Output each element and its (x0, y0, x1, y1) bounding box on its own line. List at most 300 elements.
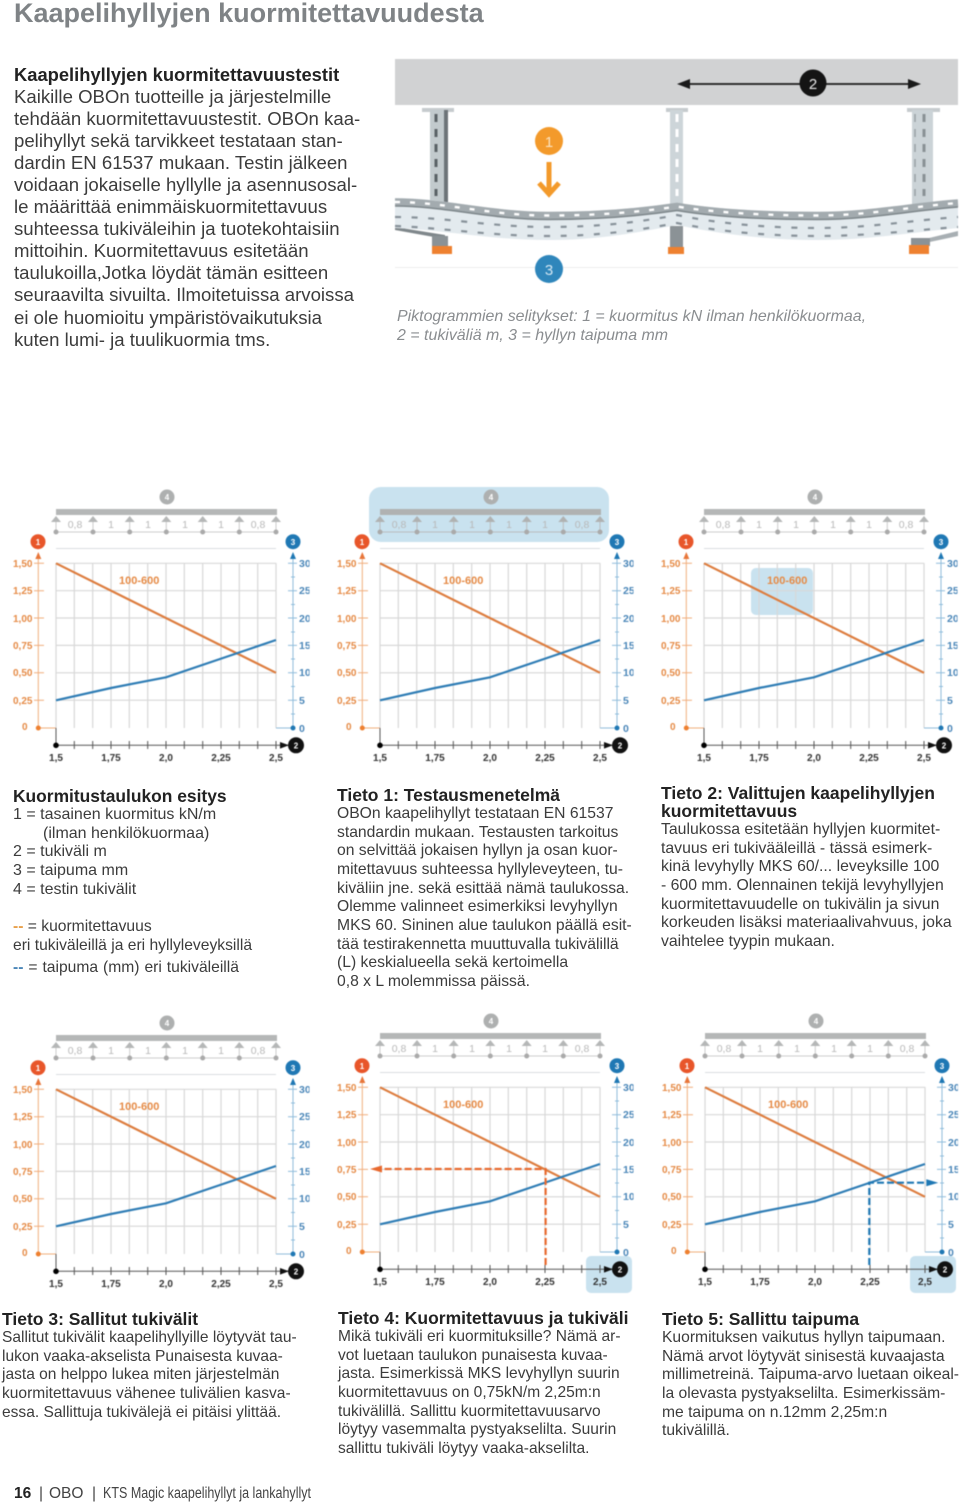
text block: fact 4: sallittu tukiväli löytyy vaaka-akselilta. (338, 1440, 589, 1457)
text block: fact 5 (662, 1309, 959, 1439)
right axis: 5 (947, 695, 953, 707)
test spans (51, 490, 281, 548)
test spans: 0,8 (392, 1043, 406, 1055)
left axis: 0,50 (13, 668, 33, 679)
test spans: 1 (432, 1043, 438, 1055)
x axis: 2,25 (535, 753, 555, 764)
left axis: 1,00 (13, 614, 33, 625)
text block: fact 3: Tieto 3: Sallitut tukivälit (2, 1309, 198, 1329)
left axis: 1,50 (662, 1083, 682, 1094)
test spans: 1 (756, 519, 762, 531)
grid (56, 1089, 276, 1254)
highlight: max span (586, 1256, 632, 1293)
grid (380, 563, 600, 728)
chart 6 (662, 1013, 960, 1294)
deflection line (380, 640, 600, 700)
text block: fact 2: - 600 mm. Olennainen tekijä levyhyllyjen (661, 877, 944, 894)
left axis: 1,25 (662, 1110, 682, 1121)
text block: fact 1: standardin mukaan. Testausten tarkoitus (337, 824, 618, 841)
right axis: 10 (947, 667, 959, 679)
test spans (375, 1014, 605, 1072)
text block: chart explanation: 2 = tukiväli m (13, 843, 107, 860)
text block: fact 4: vot luetaan taulukon punaisesta kuvaa- (338, 1347, 608, 1364)
left axis: 0,75 (13, 1167, 33, 1178)
x axis: 2,25 (859, 753, 879, 764)
text block: fact 3: essa. Sallittuja tukivälejä ei pitäisi ylittää. (2, 1404, 281, 1421)
right axis: 3 (291, 1064, 296, 1073)
left axis: 1 (360, 538, 365, 547)
right axis: 25 (299, 1111, 311, 1123)
right axis: 15 (623, 640, 635, 652)
right axis: 10 (623, 667, 635, 679)
text block: fact 1: MKS 60. Sininen alue taulukon päällä esit- (337, 917, 632, 934)
grid (380, 1087, 600, 1252)
left axis: 0,25 (662, 1220, 682, 1231)
ceiling band (395, 59, 958, 105)
test spans: 4 (489, 493, 494, 502)
footer brand: | (39, 1485, 43, 1502)
right axis: 30 (948, 1082, 960, 1094)
left axis: 0,25 (13, 1222, 33, 1233)
text block: load tests: tehdään kuormitettavuustestit. OBOn kaa- (14, 108, 360, 129)
right axis (924, 534, 960, 735)
test spans: 1 (182, 1045, 188, 1057)
right axis: 25 (948, 1109, 960, 1121)
load line (380, 563, 600, 673)
test spans: 1 (867, 1043, 873, 1055)
text block: fact 3: jasta on helppo lukea miten järjestelmän (2, 1366, 279, 1383)
right axis: 0 (623, 1247, 629, 1259)
left axis: 0,75 (337, 641, 357, 652)
cable tray (395, 198, 958, 240)
right axis: 15 (948, 1164, 960, 1176)
x axis: 2 (618, 1266, 623, 1274)
right axis: 25 (947, 585, 959, 597)
test spans: 0,8 (716, 519, 730, 531)
text block: chart explanation: (ilman henkilökuormaa) (43, 825, 209, 842)
orange feet (432, 245, 929, 254)
load line: 100-600 (443, 575, 483, 587)
text block: load tests (14, 64, 360, 350)
test spans: 4 (165, 1019, 170, 1028)
deflection line (704, 640, 924, 700)
text block: fact 4: kuormitettavuus on 0,75kN/m 2,25m:n (338, 1384, 601, 1401)
left axis: 0 (346, 1246, 352, 1257)
left axis: 0,25 (337, 696, 357, 707)
left axis: 1,50 (337, 559, 357, 570)
illustration: cable tray under load (394, 58, 959, 284)
badge 1: 1 (545, 134, 553, 151)
right axis: 0 (299, 1249, 305, 1261)
right axis: 0 (299, 723, 305, 735)
test spans: 1 (793, 519, 799, 531)
text block: fact 4 (338, 1308, 628, 1457)
load line: 100-600 (119, 575, 159, 587)
text block: chart explanation: Kuormitustaulukon esitys (13, 786, 227, 806)
text block: fact 4: jasta. Esimerkissä MKS levyhyllyn suurin (338, 1365, 620, 1382)
badge 2: 2 (809, 76, 817, 93)
x axis: 2,25 (211, 1279, 231, 1290)
right axis: 0 (947, 723, 953, 735)
load line: 100-600 (767, 575, 807, 587)
x axis: 1,75 (425, 1277, 445, 1288)
right axis: 10 (948, 1191, 960, 1203)
text block: load tests: Kaikille OBOn tuotteille ja järjestelmille (14, 86, 331, 107)
left axis: 1,00 (337, 1138, 357, 1149)
load line: 100-600 (768, 1099, 808, 1111)
right axis: 5 (299, 1221, 305, 1233)
x axis: 2 (294, 1268, 299, 1276)
test spans: 4 (814, 1017, 819, 1026)
text block: fact 2: vaihtelee tyypin mukaan. (661, 933, 835, 950)
page number: 16 (14, 1485, 32, 1502)
legend (13, 918, 252, 976)
right axis: 3 (615, 538, 620, 547)
test spans: 1 (542, 1043, 548, 1055)
load line (705, 1087, 925, 1197)
x axis: 1,5 (49, 753, 63, 764)
x axis: 1,75 (749, 753, 769, 764)
right axis (276, 1060, 320, 1261)
right axis: 20 (948, 1137, 960, 1149)
left axis: 0,50 (661, 668, 681, 679)
text block: fact 1 (337, 785, 632, 990)
test spans: 1 (506, 519, 512, 531)
right axis: 25 (299, 585, 311, 597)
text block: load tests: le määrittää enimmäiskuormitettavuus (14, 196, 327, 217)
x axis (373, 1252, 628, 1288)
test spans: 1 (145, 1045, 151, 1057)
test spans (375, 490, 605, 548)
test spans: 1 (794, 1043, 800, 1055)
legend: -- = taipuma (mm) eri tukiväleillä (13, 959, 239, 976)
text block: load tests: kuten lumi- ja tuulikuormia tms. (14, 329, 270, 350)
right axis: 0 (623, 723, 629, 735)
text block: fact 2: korkeuden lisäksi materiaalivahvuus, joka (661, 914, 952, 931)
right axis: 3 (615, 1062, 620, 1071)
load line (56, 1089, 276, 1199)
test spans: 0,8 (899, 519, 913, 531)
left axis: 0,50 (337, 1192, 357, 1203)
right axis: 0 (948, 1247, 954, 1259)
x axis: 2,0 (483, 753, 497, 764)
footer brand: | (92, 1485, 96, 1502)
left axis: 1,50 (661, 559, 681, 570)
test spans: 0,8 (68, 1045, 82, 1057)
left axis: 0,75 (662, 1165, 682, 1176)
text block: fact 1: on selvittää jokaisen hyllyn ja osan kuor- (337, 842, 618, 859)
x axis: 2,5 (269, 1279, 283, 1290)
left axis: 1,50 (337, 1083, 357, 1094)
right axis: 15 (299, 1166, 311, 1178)
deflection line (56, 640, 276, 700)
text block: fact 4: tukivälillä. Sallittu kuormitettavuusarvo (338, 1403, 601, 1420)
right axis (600, 1058, 644, 1259)
right axis: 20 (299, 1139, 311, 1151)
text block: fact 5: Kuormituksen vaikutus hyllyn taipumaan. (662, 1329, 945, 1346)
x axis: 1,5 (697, 753, 711, 764)
left axis: 0,50 (337, 668, 357, 679)
x axis: 2,5 (918, 1277, 932, 1288)
text block: load tests: taulukoilla,Jotka löydät tämän esitteen (14, 262, 328, 283)
text block: chart explanation: 3 = taipuma mm (13, 862, 128, 879)
text block: fact 5: millimetreinä. Taipuma-arvo luetaan oikeal- (662, 1366, 959, 1383)
x axis: 2,0 (159, 1279, 173, 1290)
text block: fact 1: Tieto 1: Testausmenetelmä (337, 785, 560, 805)
right axis: 25 (623, 585, 635, 597)
load line (380, 1087, 600, 1197)
x axis (698, 1252, 953, 1288)
test spans: 1 (182, 519, 188, 531)
text block: fact 1: kiväliin jne. sekä esittää nämä taulukossa. (337, 880, 629, 897)
x axis: 2 (618, 742, 623, 750)
right axis: 20 (947, 613, 959, 625)
load line (56, 563, 276, 673)
x axis: 1,5 (698, 1277, 712, 1288)
text block: fact 2: kinä levyhylly MKS 60/... leveyksille 100 (661, 858, 939, 875)
x axis: 2 (942, 742, 947, 750)
text block: chart explanation (13, 786, 227, 898)
test spans: 1 (506, 1043, 512, 1055)
right axis: 10 (623, 1191, 635, 1203)
load line: 100-600 (119, 1101, 159, 1113)
left axis: 0,25 (13, 696, 33, 707)
left axis: 0,75 (13, 641, 33, 652)
text block: fact 3 (2, 1309, 297, 1421)
x axis: 2,0 (159, 753, 173, 764)
deflection line (380, 1164, 600, 1224)
text block: load tests: mittoihin. Kuormitettavuus esitetään (14, 240, 309, 261)
right axis: 30 (299, 558, 311, 570)
text block: chart explanation: 4 = testin tukivälit (13, 881, 136, 898)
test spans: 1 (108, 519, 114, 531)
test spans: 1 (866, 519, 872, 531)
right axis: 10 (299, 1193, 311, 1205)
arrow: load (539, 162, 559, 194)
right axis: 20 (623, 613, 635, 625)
text block: fact 5: la olevasta pystyakselilta. Esimerkissäm- (662, 1385, 945, 1402)
x axis (373, 728, 628, 764)
test spans: 0,8 (251, 519, 265, 531)
right axis: 3 (940, 1062, 945, 1071)
left axis (661, 534, 704, 733)
test spans (700, 1014, 930, 1072)
test spans: 1 (757, 1043, 763, 1055)
left axis: 0,25 (337, 1220, 357, 1231)
left axis: 0 (671, 1246, 677, 1257)
left axis: 0 (22, 722, 28, 733)
right axis: 15 (299, 640, 311, 652)
left axis: 0,50 (13, 1194, 33, 1205)
arrow: span (677, 79, 921, 89)
x axis: 1,5 (49, 1279, 63, 1290)
badge 1 (535, 127, 563, 155)
left axis: 0,75 (337, 1165, 357, 1176)
test spans (51, 1016, 281, 1074)
left axis: 1,00 (661, 614, 681, 625)
test spans (699, 490, 929, 548)
highlight: width label (751, 568, 813, 615)
test spans: 0,8 (717, 1043, 731, 1055)
chart 3 (660, 489, 959, 764)
text block: fact 2: Taulukossa esitetään hyllyjen kuormitet- (661, 821, 940, 838)
text block: load tests: voidaan jokaiselle hyllylle ja asennusosal- (14, 174, 357, 195)
highlight: test spans (369, 487, 609, 542)
left axis: 1 (36, 1064, 41, 1073)
x axis: 2,0 (483, 1277, 497, 1288)
x axis: 1,5 (373, 753, 387, 764)
grid (56, 563, 276, 728)
right axis (600, 534, 644, 735)
x axis: 1,5 (373, 1277, 387, 1288)
chart 1 (12, 489, 311, 764)
test spans: 4 (489, 1017, 494, 1026)
text block: fact 1: OBOn kaapelihyllyt testataan EN 61537 (337, 805, 613, 822)
x axis: 2,5 (593, 753, 607, 764)
x axis (697, 728, 952, 764)
text block: fact 4: Tieto 4: Kuormitettavuus ja tukiväli (338, 1308, 628, 1328)
test spans: 1 (830, 519, 836, 531)
grid (705, 1087, 925, 1252)
left axis: 1,25 (337, 586, 357, 597)
test spans: 1 (469, 519, 475, 531)
caption: pictogram legend (396, 308, 866, 344)
x axis: 2,5 (917, 753, 931, 764)
right axis: 10 (299, 667, 311, 679)
left axis (337, 1058, 380, 1257)
text block: fact 2: Tieto 2: Valittujen kaapelihyllyjen (661, 783, 935, 803)
left axis: 0 (346, 722, 352, 733)
text block: fact 2 (661, 783, 952, 950)
test spans: 0,8 (575, 519, 589, 531)
left axis: 0 (22, 1248, 28, 1259)
left axis: 0,25 (661, 696, 681, 707)
test spans: 0,8 (68, 519, 82, 531)
test spans: 1 (218, 519, 224, 531)
x axis: 2,5 (269, 753, 283, 764)
deflection line (705, 1164, 925, 1224)
footer (14, 1485, 312, 1502)
text block: fact 3: kuormitettavuus vähenee tulivälien kasva- (2, 1385, 291, 1402)
legend: eri tukiväleillä ja eri hyllyleveyksillä (13, 937, 252, 954)
test spans: 1 (108, 1045, 114, 1057)
test spans: 4 (813, 493, 818, 502)
left axis: 1,00 (13, 1140, 33, 1151)
right axis: 30 (623, 558, 635, 570)
chart 2 (336, 486, 635, 764)
test spans: 1 (218, 1045, 224, 1057)
right axis: 20 (299, 613, 311, 625)
test spans: 0,8 (392, 519, 406, 531)
test spans: 0,8 (900, 1043, 914, 1055)
left axis: 0,50 (662, 1192, 682, 1203)
text block: load tests: pelihyllyt sekä tarvikkeet testataan stan- (14, 130, 343, 151)
left axis (337, 534, 380, 733)
left axis: 1,50 (13, 1085, 33, 1096)
left axis (13, 1060, 56, 1259)
chart 4 (12, 1015, 311, 1290)
right axis: 5 (623, 1219, 629, 1231)
text block: fact 3: Sallitut tukivälit kaapelihyllyille löytyvät tau- (2, 1329, 297, 1346)
text block: fact 2: kuormitettavuus (661, 801, 797, 821)
text block: load tests: seuraavilta sivuilta. Ilmoitetuissa arvoissa (14, 284, 354, 305)
text block: fact 1: 0,8 x L molemmissa päissä. (337, 973, 530, 990)
badge 3 (535, 255, 563, 283)
text block: fact 1: Olemme valinneet esimerkiksi levyhyllyn (337, 898, 618, 915)
text block: fact 4: löytyy vasemmalta pystyakselilta. Suurin (338, 1421, 616, 1438)
left axis: 1 (360, 1062, 365, 1071)
left axis: 1,00 (337, 614, 357, 625)
x axis: 2,25 (535, 1277, 555, 1288)
text block: load tests: Kaapelihyllyjen kuormitettavuustestit (14, 64, 339, 85)
badge 2 (800, 70, 826, 96)
left axis: 1,00 (662, 1138, 682, 1149)
legend: -- = kuormitettavuus (13, 918, 152, 935)
right axis: 30 (947, 558, 959, 570)
footer brand: OBO (49, 1485, 83, 1502)
arrow: read load from span (370, 1166, 546, 1265)
x axis (49, 1254, 304, 1290)
baseline (395, 266, 958, 268)
test spans: 4 (165, 493, 170, 502)
text block: fact 5: me taipuma on n.12mm 2,25m:n (662, 1404, 887, 1421)
test spans: 1 (831, 1043, 837, 1055)
left axis: 1,25 (661, 586, 681, 597)
left axis: 1,50 (13, 559, 33, 570)
right axis: 5 (623, 695, 629, 707)
text block: load tests: dardin EN 61537 mukaan. Testin jälkeen (14, 152, 348, 173)
right axis: 25 (623, 1109, 635, 1121)
badge 3: 3 (545, 262, 553, 279)
text block: fact 1: mitettavuus suhteessa hyllyleveyteen, tu- (337, 861, 623, 878)
test spans: 1 (542, 519, 548, 531)
x axis: 2,25 (860, 1277, 880, 1288)
deflection line (56, 1166, 276, 1226)
text block: fact 2: kuormitettavuudelle on tukivälin ja sivun (661, 896, 939, 913)
x axis (49, 728, 304, 764)
caption: pictogram legend: 2 = tukiväliä m, 3 = hyllyn taipuma mm (397, 326, 668, 344)
right axis (925, 1058, 960, 1259)
left axis: 1 (685, 1062, 690, 1071)
caption: pictogram legend: Piktogrammien selitykset: 1 = kuormitus kN ilman henkilökuormaa, (397, 308, 866, 325)
text block: fact 5: tukivälillä. (662, 1422, 730, 1439)
x axis: 1,75 (101, 753, 121, 764)
right axis: 5 (299, 695, 305, 707)
left axis (13, 534, 56, 733)
test spans: 0,8 (575, 1043, 589, 1055)
text block: fact 4: Mikä tukiväli eri kuormituksille? Nämä ar- (338, 1328, 621, 1345)
text block: fact 1: tää testirakennetta muuttuvalla tukivälillä (337, 936, 619, 953)
x axis: 2,5 (593, 1277, 607, 1288)
x axis: 2,25 (211, 753, 231, 764)
left axis: 1,25 (13, 586, 33, 597)
load line: 100-600 (443, 1099, 483, 1111)
arrow: read deflection from span (869, 1179, 938, 1265)
x axis: 1,75 (101, 1279, 121, 1290)
x axis: 1,75 (750, 1277, 770, 1288)
left axis: 1 (684, 538, 689, 547)
right axis: 30 (623, 1082, 635, 1094)
left axis: 0 (670, 722, 676, 733)
left axis: 1,25 (13, 1112, 33, 1123)
right axis: 3 (939, 538, 944, 547)
text block: fact 3: lukon vaaka-akselista Punaisesta kuvaa- (2, 1348, 283, 1365)
left axis (662, 1058, 705, 1257)
text block: load tests: ei ole huomioitu ympäristövaikutuksia (14, 307, 322, 328)
left axis: 1,25 (337, 1110, 357, 1121)
text block: fact 5: Tieto 5: Sallittu taipuma (662, 1309, 859, 1329)
right axis: 15 (947, 640, 959, 652)
